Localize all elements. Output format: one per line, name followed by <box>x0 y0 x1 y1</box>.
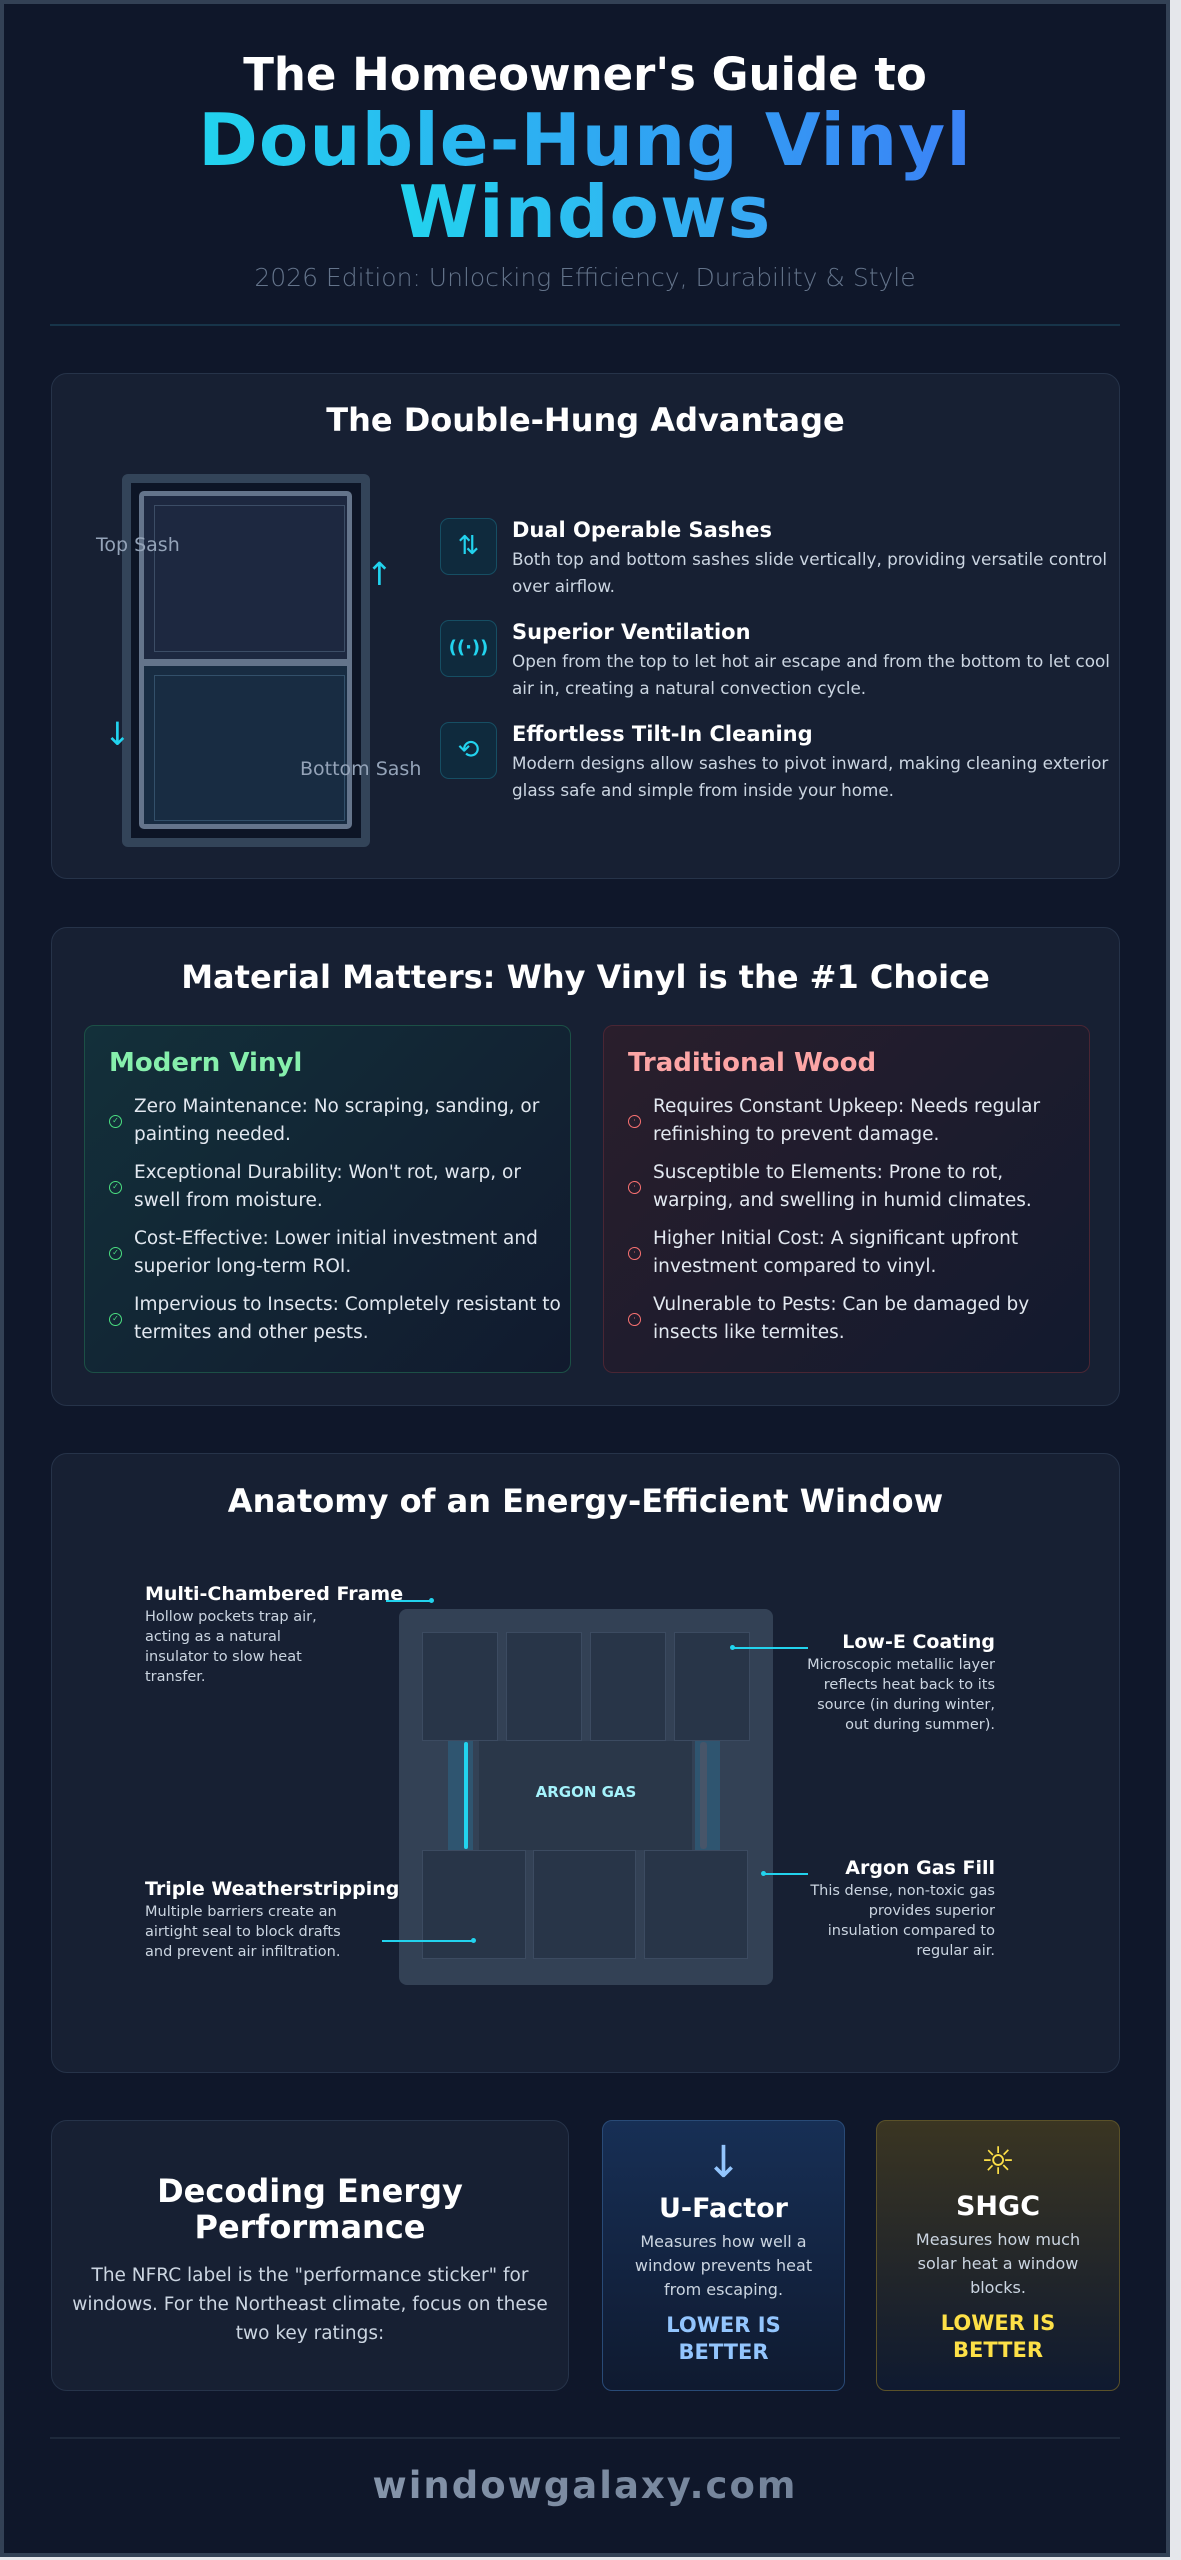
feature: tilt-in: Effortless Tilt-In Cleaning <box>512 722 813 746</box>
arrow down: ↓ <box>104 715 131 753</box>
card: modern vinyl: Zero Maintenance: No scraping, sanding, or painting needed. <box>134 1096 539 1145</box>
feature: tilt-in: Modern designs allow sashes to pivot inward, making cleaning exterior glass safe and simple from inside your home. <box>512 753 1108 800</box>
feature: dual sashes: Both top and bottom sashes slide vertically, providing versatile control over airflow. <box>512 549 1107 596</box>
label: top sash: Top Sash <box>96 534 180 556</box>
card: traditional wood: · <box>633 1182 636 1190</box>
title: Double-Hung Vinyl <box>198 98 972 182</box>
label: bottom sash: Bottom Sash <box>300 758 421 780</box>
title <box>198 48 972 254</box>
callout: argon gas fill: Argon Gas Fill <box>845 1857 995 1879</box>
label: argon gas: ARGON GAS <box>536 1783 636 1801</box>
card: shgc: Measures how much solar heat a window blocks. <box>916 2230 1080 2297</box>
callout: low-e coating: Microscopic metallic layer reflects heat back to its source (in during winter, out during summer). <box>807 1657 995 1733</box>
footer brand <box>0 2464 1170 2507</box>
feature: dual sashes: Dual Operable Sashes <box>512 518 772 542</box>
feature: ventilation: Superior Ventilation <box>512 620 751 644</box>
card: modern vinyl: ✓ <box>112 1314 119 1322</box>
card: u-factor <box>602 2120 845 2391</box>
icon: tilt: ⟲ <box>458 735 479 765</box>
icon: down arrow: ↓ <box>705 2137 742 2188</box>
heading: The Double-Hung Advantage <box>326 401 845 439</box>
callout: low-e coating: Low-E Coating <box>842 1631 995 1653</box>
arrow up: ↑ <box>366 555 393 593</box>
feature: ventilation: Open from the top to let hot air escape and from the bottom to let cool air in, creating a natural convection cycle. <box>512 651 1110 698</box>
card: modern vinyl: ✓ <box>112 1182 119 1190</box>
heading <box>157 2172 463 2246</box>
card: modern vinyl: ✓ <box>112 1116 119 1124</box>
card: traditional wood: Susceptible to Elements: Prone to rot, warping, and swelling in humid climates. <box>653 1162 1032 1211</box>
card: u-factor: LOWER IS <box>666 2313 781 2337</box>
card: modern vinyl: Exceptional Durability: Won't rot, warp, or swell from moisture. <box>134 1162 521 1211</box>
card: shgc: BETTER <box>953 2338 1043 2362</box>
card: traditional wood: Vulnerable to Pests: Can be damaged by insects like termites. <box>653 1294 1029 1343</box>
icon: sun: ☼ <box>981 2139 1015 2183</box>
card: shgc: SHGC <box>956 2191 1040 2222</box>
icon: ventilation: ((·)) <box>449 637 488 658</box>
icon: ventilation <box>440 620 497 677</box>
callout: triple weatherstripping: Triple Weatherstripping <box>145 1878 399 1900</box>
callout: multi-chambered frame <box>145 1583 403 1685</box>
card: modern vinyl: Impervious to Insects: Completely resistant to termites and other pests. <box>134 1294 561 1343</box>
card: traditional wood: Traditional Wood <box>628 1048 876 1078</box>
window diagram <box>96 474 421 847</box>
icon: tilt <box>440 722 497 779</box>
feature: dual sashes <box>512 518 1107 596</box>
feature: tilt-in <box>512 722 1108 800</box>
panel: anatomy <box>51 1453 1120 2073</box>
card: modern vinyl: Cost-Effective: Lower initial investment and superior long-term ROI. <box>134 1228 538 1277</box>
title: Windows <box>399 170 771 254</box>
panel: material matters <box>51 927 1120 1406</box>
card: modern vinyl: Modern Vinyl <box>109 1048 302 1078</box>
callout: triple weatherstripping: Multiple barriers create an airtight seal to block drafts and prevent air infiltration. <box>145 1904 341 1960</box>
card: u-factor: U-Factor <box>659 2193 788 2224</box>
card: traditional wood: Requires Constant Upkeep: Needs regular refinishing to prevent damage. <box>653 1096 1040 1145</box>
card: shgc <box>876 2120 1120 2391</box>
card: shgc: LOWER IS <box>941 2311 1055 2335</box>
title: The Homeowner's Guide to <box>243 48 927 101</box>
icon: arrows: ⇅ <box>458 531 479 561</box>
callout: multi-chambered frame: Hollow pockets trap air, acting as a natural insulator to slow heat transfer. <box>145 1609 317 1685</box>
card: traditional wood: Higher Initial Cost: A significant upfront investment compared to vinyl. <box>653 1228 1018 1277</box>
feature: ventilation <box>512 620 1110 698</box>
heading: Material Matters: Why Vinyl is the #1 Choice <box>181 958 990 996</box>
heading: Anatomy of an Energy-Efficient Window <box>228 1482 943 1520</box>
heading: Decoding Energy <box>157 2172 463 2210</box>
window cross-section diagram <box>399 1609 773 1985</box>
callout: argon gas fill: This dense, non-toxic gas provides superior insulation compared to regular air. <box>810 1883 995 1959</box>
subtitle: 2026 Edition: Unlocking Efficiency, Durability & Style <box>254 263 916 292</box>
callout: triple weatherstripping <box>145 1878 399 1960</box>
panel: double-hung advantage <box>51 373 1120 879</box>
card: u-factor: Measures how well a window prevents heat from escaping. <box>635 2232 812 2299</box>
card: modern vinyl <box>84 1025 571 1373</box>
card: u-factor: BETTER <box>678 2340 768 2364</box>
card: modern vinyl: ✓ <box>112 1248 119 1256</box>
card: traditional wood: · <box>633 1314 636 1322</box>
footer brand: windowgalaxy.com <box>373 2464 797 2507</box>
text block: The NFRC label is the "performance sticker" for windows. For the Northeast climate, focus on these two key ratings: <box>72 2265 548 2344</box>
callout: multi-chambered frame: Multi-Chambered Frame <box>145 1583 403 1605</box>
card: traditional wood <box>603 1025 1090 1373</box>
card: traditional wood: · <box>633 1116 636 1124</box>
icon: arrows <box>440 518 497 575</box>
panel: decoding energy performance <box>51 2120 569 2391</box>
heading: Performance <box>194 2208 426 2246</box>
card: traditional wood: · <box>633 1248 636 1256</box>
